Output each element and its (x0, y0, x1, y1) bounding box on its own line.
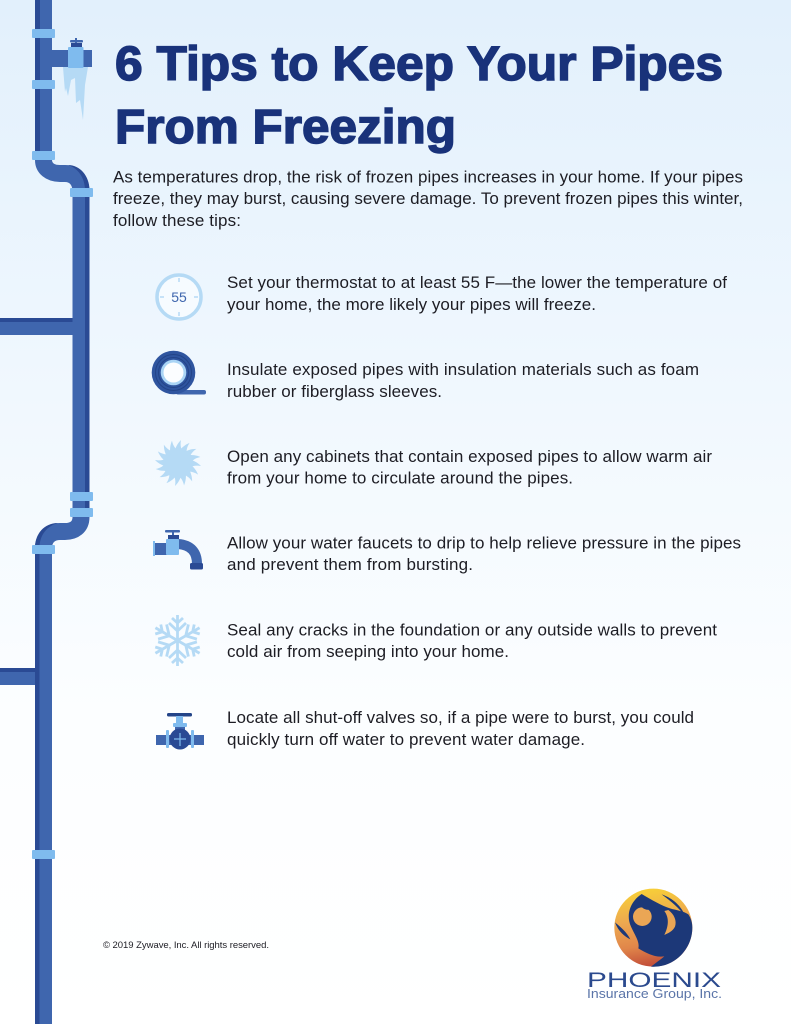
tip 6 text: Locate all shut-off valves so, if a pipe were to burst, you could (227, 708, 694, 727)
copyright: © 2019 Zywave, Inc. All rights reserved. (103, 940, 269, 951)
intro text: freeze, they may burst, causing severe damage. To prevent frozen pipes this winter, (113, 189, 743, 208)
tip 6 text: quickly turn off water to prevent water damage. (227, 730, 585, 749)
lower vertical pipe with bend (35, 320, 90, 1024)
pipe collars (32, 29, 93, 859)
tip 1 text: your home, the more likely your pipes will freeze. (227, 295, 596, 314)
logo tagline: Insurance Group, Inc. (587, 986, 722, 1001)
tip 3 text (227, 447, 712, 488)
logo emblem (614, 889, 692, 967)
pipe system (0, 0, 93, 1024)
tip 5: snowflake (151, 615, 717, 666)
icon: insulation roll (152, 351, 206, 394)
tip 3: cabinets (155, 440, 712, 488)
intro text (113, 168, 743, 230)
tip 1 text (227, 273, 727, 314)
icon: thermostat dial (157, 275, 201, 319)
title: 6 Tips to Keep Your Pipes (115, 38, 723, 91)
icon: snowflake (151, 615, 204, 666)
tip 6: valve (156, 708, 694, 750)
upper vertical pipe with bend (35, 0, 90, 500)
tip 5 text: Seal any cracks in the foundation or any outside walls to prevent (227, 620, 717, 640)
title: From Freezing (115, 101, 456, 154)
tip 6 text (227, 708, 694, 749)
tip 1: thermostat (157, 273, 727, 319)
tip 2 text (227, 360, 699, 401)
horizontal branch pipes (0, 318, 74, 685)
tip 2 text: rubber or fiberglass sleeves. (227, 382, 442, 401)
icon: sun (155, 440, 201, 486)
tip 4: faucet (153, 530, 741, 574)
intro text: As temperatures drop, the risk of frozen pipes increases in your home. If your pipes (113, 168, 743, 186)
tip 3 text: from your home to circulate around the pipes. (227, 468, 573, 488)
logo wordmark: PHOENIX (587, 969, 721, 992)
logo: Phoenix Insurance Group (587, 889, 722, 1001)
tip 4 text (227, 534, 741, 574)
tip 2 text: Insulate exposed pipes with insulation materials such as foam (227, 360, 699, 379)
tip 5 text (227, 620, 717, 661)
tip 3 text: Open any cabinets that contain exposed pipes to allow warm air (227, 447, 712, 466)
icon: dripping faucet (153, 530, 203, 570)
icon: shut-off valve (156, 713, 204, 750)
title (115, 38, 723, 154)
intro text: follow these tips: (113, 211, 241, 230)
tip 2: insulation (152, 351, 699, 401)
tip 5 text: cold air from seeping into your home. (227, 642, 509, 661)
tip 4 text: and prevent them from bursting. (227, 555, 473, 574)
icon: thermostat dial: 55 (171, 289, 187, 305)
icon: frozen faucet with icicles (52, 38, 92, 120)
tip 4 text: Allow your water faucets to drip to help relieve pressure in the pipes (227, 534, 741, 552)
tip 1 text: Set your thermostat to at least 55 F—the lower the temperature of (227, 273, 727, 292)
